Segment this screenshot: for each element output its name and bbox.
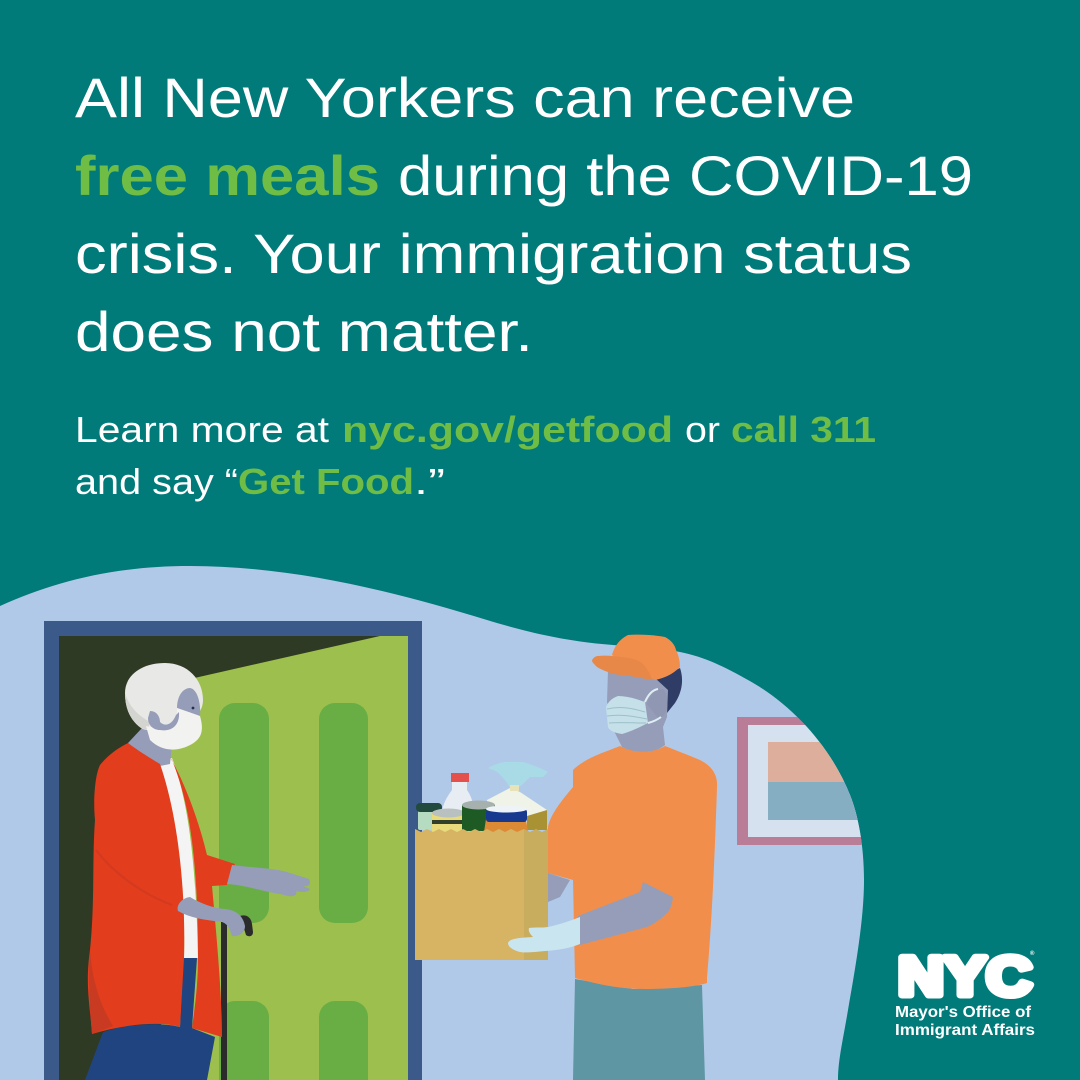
- grocery items: [416, 762, 548, 832]
- call to action text: and say “: [75, 461, 238, 502]
- front arm: [578, 882, 673, 945]
- ear: [647, 689, 667, 718]
- glove: [508, 917, 580, 952]
- orange cap: [592, 635, 680, 680]
- jar: [418, 808, 439, 830]
- call to action text: or: [685, 409, 720, 450]
- bottle: [440, 782, 475, 830]
- white shirt: [158, 758, 198, 958]
- heading: during the COVID-19: [398, 144, 973, 207]
- red coat: [88, 743, 184, 1034]
- neck: [128, 725, 172, 766]
- heading: [75, 66, 973, 363]
- paper bag: [415, 829, 548, 960]
- call to action text: Learn more at: [75, 409, 329, 450]
- trousers: [85, 958, 215, 1080]
- hand on cane: [178, 897, 245, 936]
- hair: [655, 668, 682, 718]
- NYC logo: Immigrant Affairs: [895, 1022, 1035, 1039]
- cane: [221, 922, 227, 1080]
- call to action text: .”: [414, 461, 445, 502]
- yellow can: [432, 812, 465, 832]
- NYC logo: [895, 945, 1035, 1039]
- orange t-shirt: [548, 746, 717, 989]
- wall picture: [737, 717, 862, 845]
- coat shading: [89, 950, 113, 1034]
- call to action text: Get Food: [238, 461, 414, 502]
- blue jar: [484, 819, 528, 832]
- face: [177, 688, 200, 716]
- heading: All New Yorkers can receive: [75, 66, 855, 129]
- trousers: [573, 979, 705, 1080]
- white hair: [125, 663, 203, 730]
- reaching hand: [227, 865, 310, 896]
- head and neck: [607, 670, 668, 752]
- NYC logo: NYC: [898, 945, 1032, 1007]
- face mask: [606, 689, 661, 734]
- call to action text: call 311: [731, 409, 876, 450]
- elderly person: [85, 663, 310, 1080]
- NYC logo: Mayor's Office of: [895, 1004, 1032, 1021]
- back arm: [548, 873, 570, 902]
- heading: does not matter.: [75, 300, 533, 363]
- illustration backdrop: [0, 566, 864, 1080]
- call to action text: [75, 409, 876, 502]
- heading: crisis. Your immigration status: [75, 222, 912, 285]
- NYC logo: ®: [1030, 950, 1035, 957]
- delivery worker: [415, 635, 717, 1080]
- call to action text: nyc.gov/getfood: [342, 409, 673, 450]
- bread bag: [487, 788, 547, 830]
- green can: [462, 805, 495, 831]
- open door: [160, 636, 408, 1080]
- heading: free meals: [75, 144, 380, 207]
- ear and sideburn: [148, 711, 179, 730]
- eye: [192, 707, 194, 709]
- beard and mask: [146, 708, 202, 750]
- doorway: [44, 621, 422, 1080]
